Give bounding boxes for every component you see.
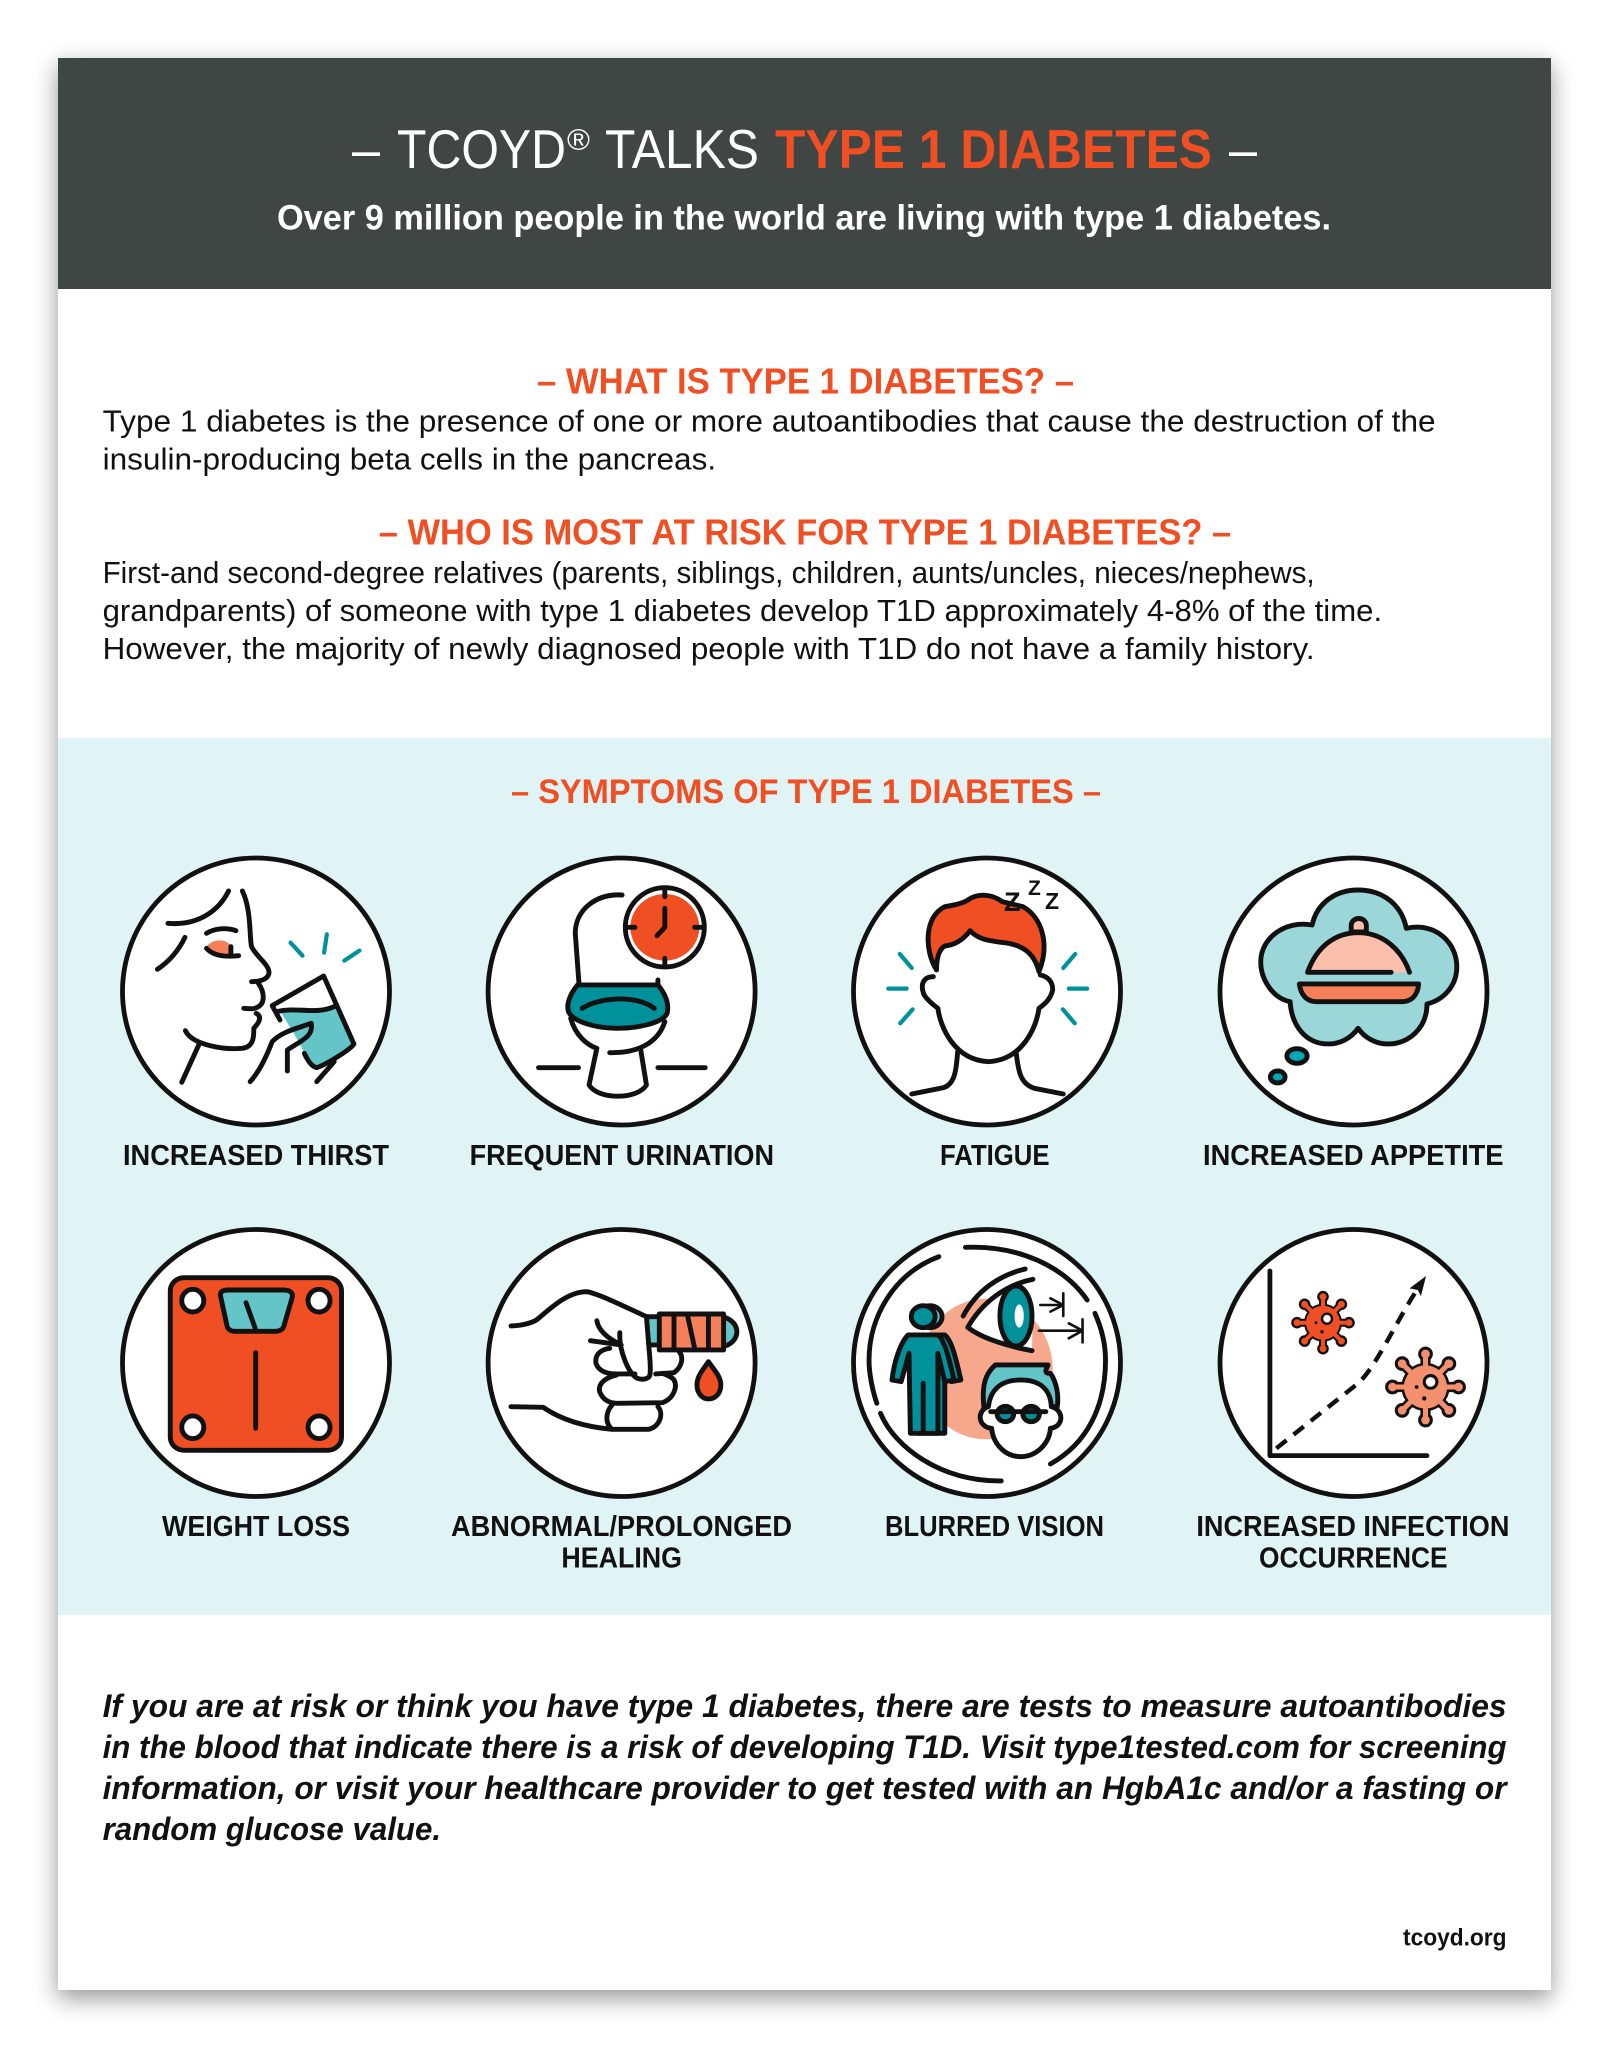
text block: definition [103, 404, 1436, 477]
title: – [352, 118, 380, 180]
text block: screening call to action: If you are at risk or think you have type 1 diabetes, there are tests to measure autoantibodies [103, 1688, 1507, 1724]
icon: infection chart with viruses [1270, 1271, 1466, 1456]
symptom: increased infection occurrence: OCCURRENCE [1259, 1543, 1448, 1575]
text block: risk explanation [103, 555, 1382, 666]
icon: toilet and clock [539, 888, 705, 1096]
label: ABNORMAL/PROLONGED [451, 1511, 792, 1543]
icon: tired head [888, 877, 1087, 1094]
subtitle: Over 9 million people in the world are living with type 1 diabetes. [277, 198, 1331, 238]
label: INCREASED INFECTION [1196, 1511, 1509, 1543]
text block: definition: Type 1 diabetes is the presence of one or more autoantibodies that cause the destruction of the [103, 404, 1436, 439]
header band [58, 58, 1551, 289]
symptom: weight loss [122, 1230, 390, 1543]
section: who is at risk [103, 512, 1382, 666]
footer url: tcoyd.org [1403, 1925, 1506, 1952]
text block: screening call to action: random glucose value. [103, 1811, 441, 1847]
icon: tired head: Z [1004, 887, 1020, 917]
text block: risk explanation: First-and second-degree relatives (parents, siblings, children, aunts/uncles, nieces/nephews, [103, 555, 1315, 590]
symptom: increased infection occurrence [1196, 1230, 1509, 1575]
icon: bathroom scale [170, 1278, 342, 1450]
label: FREQUENT URINATION [470, 1140, 774, 1172]
text block: screening call to action: in the blood that indicate there is a risk of developing T1D. Visit type1tested.com for screening [103, 1729, 1507, 1765]
text block: definition: insulin-producing beta cells in the pancreas. [103, 442, 716, 477]
icon: bandaged finger [511, 1292, 737, 1429]
label: WEIGHT LOSS [162, 1511, 350, 1543]
label: FATIGUE [940, 1140, 1050, 1172]
symptom: blurred vision [854, 1230, 1120, 1543]
label: BLURRED VISION [885, 1511, 1104, 1543]
icon: thought bubble with food [1261, 890, 1457, 1083]
icon: tired head: Z [1028, 877, 1041, 900]
text block: screening call to action [103, 1688, 1508, 1847]
text block: screening call to action: information, or visit your healthcare provider to get tested with an HgbA1c and/or a fasting or [103, 1770, 1508, 1806]
heading: what is type 1 diabetes: – WHAT IS TYPE 1 DIABETES? – [537, 360, 1074, 402]
title: TYPE 1 DIABETES [775, 118, 1212, 180]
icon: woman drinking water [157, 891, 359, 1082]
title: TALKS [605, 118, 759, 180]
heading: symptoms: – SYMPTOMS OF TYPE 1 DIABETES – [511, 773, 1101, 811]
text block: risk explanation: However, the majority of newly diagnosed people with T1D do not have a family history. [103, 631, 1315, 666]
icon: tired head: Z [1045, 888, 1059, 914]
symptom: increased appetite [1203, 858, 1504, 1172]
heading: who is most at risk: – WHO IS MOST AT RISK FOR TYPE 1 DIABETES? – [379, 512, 1231, 552]
symptom: increased thirst [122, 858, 390, 1172]
symptom: abnormal prolonged healing [451, 1230, 792, 1575]
title: TCOYD [397, 118, 566, 180]
section: what is type 1 diabetes [103, 360, 1436, 477]
symptom: frequent urination [470, 858, 774, 1172]
icon: blurred eye and people [869, 1247, 1106, 1481]
label: INCREASED THIRST [123, 1140, 389, 1172]
panel: symptoms [58, 738, 1551, 1615]
label: INCREASED APPETITE [1203, 1140, 1504, 1172]
symptom: abnormal prolonged healing: HEALING [561, 1543, 682, 1575]
text block: risk explanation: grandparents) of someone with type 1 diabetes develop T1D approximately 4-8% of the time. [103, 593, 1382, 628]
symptom: fatigue [854, 858, 1120, 1172]
title: ® [567, 124, 590, 157]
title: – [1229, 118, 1257, 180]
title [352, 118, 1257, 180]
